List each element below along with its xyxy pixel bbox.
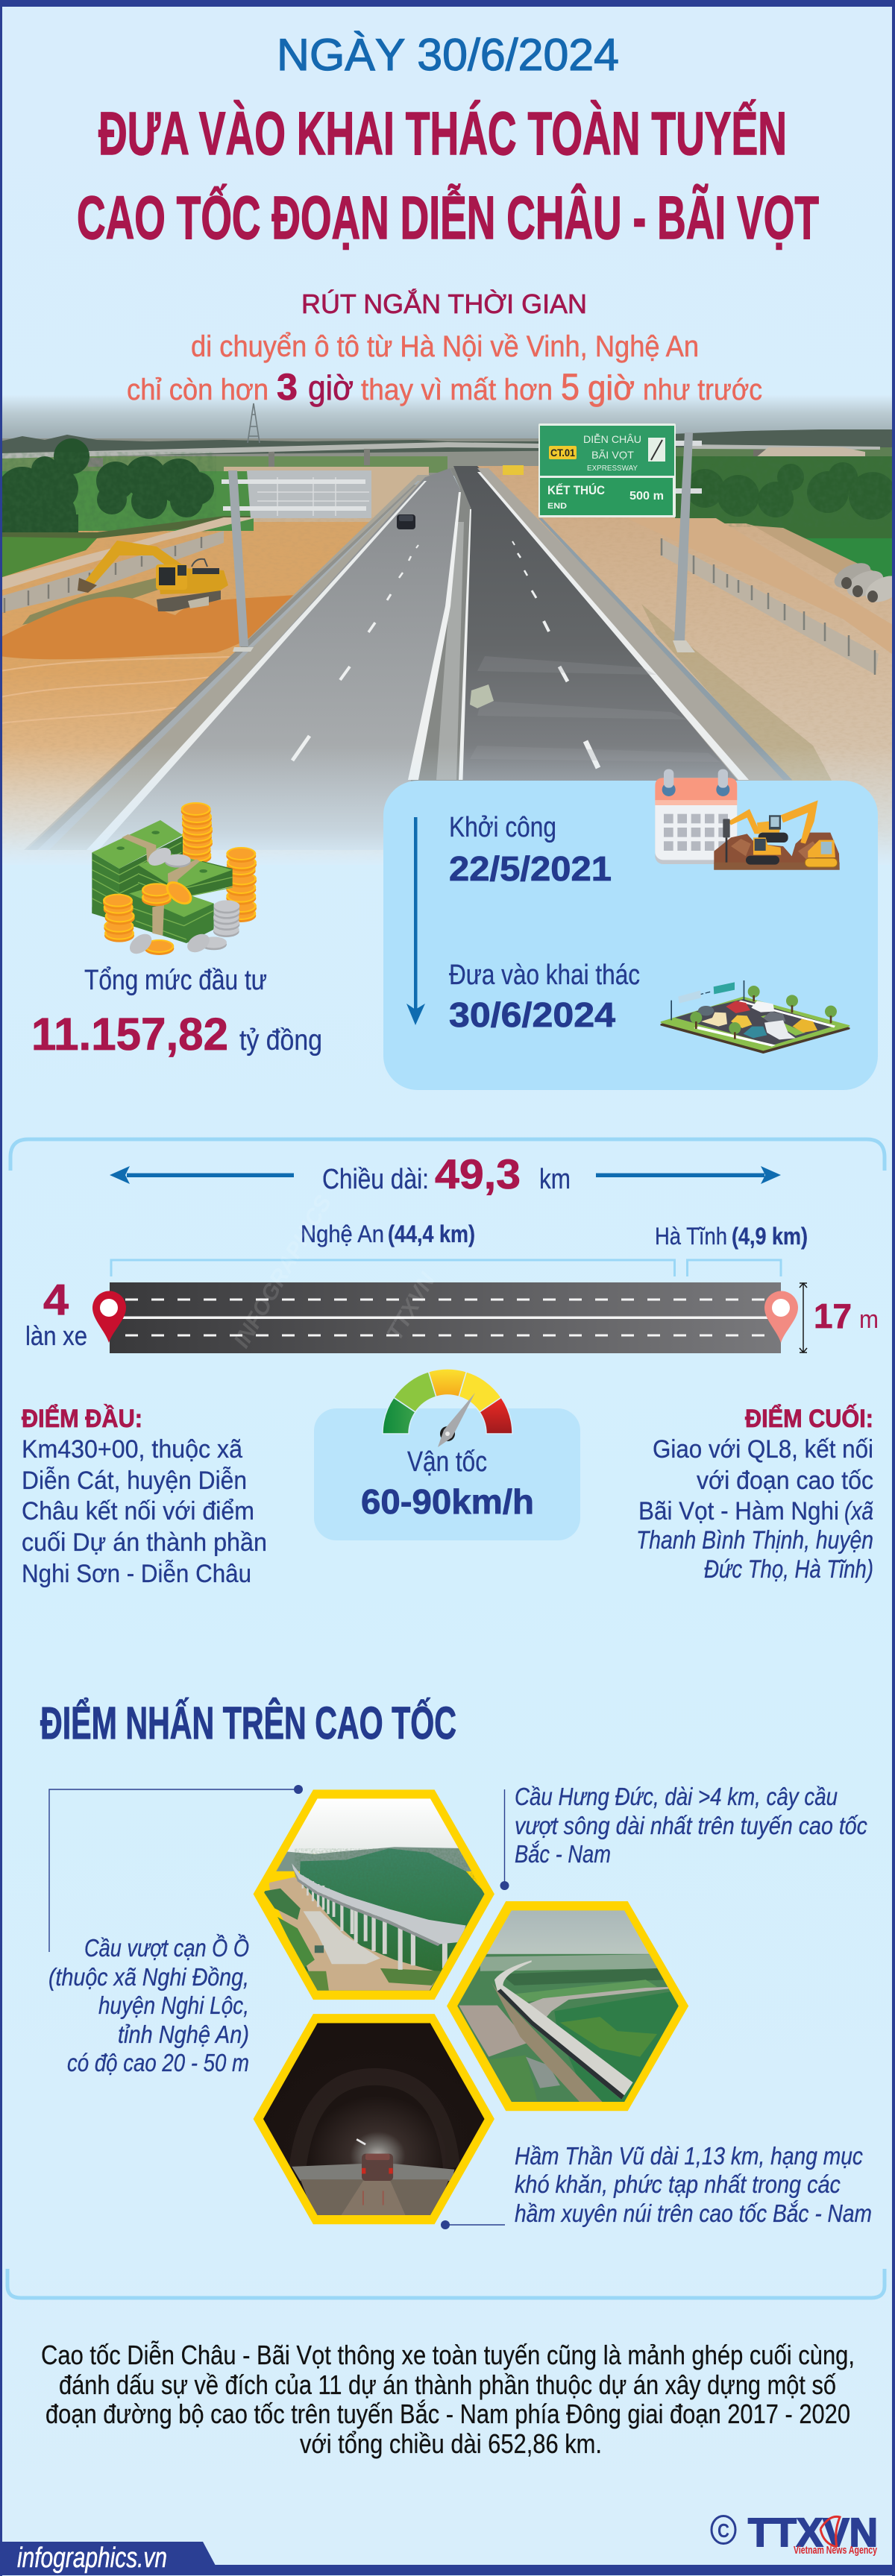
- TTXVN logo: [712, 2510, 878, 2557]
- concrete pipes: [834, 563, 892, 602]
- photo fade to background: [0, 746, 895, 865]
- panel: timeline: [383, 769, 878, 1090]
- subtitle line 3: giờ: [588, 368, 635, 407]
- closing paragraph: [41, 2340, 855, 2459]
- green highway sign: CT.01: [550, 447, 575, 459]
- end point text: [636, 1404, 873, 1584]
- callout text: tỉnh Nghệ An): [118, 2021, 249, 2048]
- length label: Chiều dài:: [322, 1164, 429, 1195]
- footer tab: [2, 2542, 216, 2574]
- right hedges and fields: [675, 456, 895, 589]
- right fence: [661, 538, 879, 675]
- right gantry pole: [673, 432, 702, 652]
- start date: 22/5/2021: [449, 849, 612, 888]
- open label: Đưa vào khai thác: [449, 960, 640, 991]
- left ground sand: [2, 522, 411, 854]
- icon: start pin: [92, 1291, 126, 1343]
- Nghệ An label: Nghệ An: [301, 1221, 384, 1247]
- end point description: Bãi Vọt - Hàm Nghi: [638, 1497, 839, 1525]
- icon: speedometer: [383, 1369, 512, 1447]
- width unit: m: [859, 1306, 879, 1334]
- right dirt road: [675, 518, 892, 654]
- road strip: TTXVN: [382, 1268, 441, 1345]
- investment label: Tổng mức đầu tư: [84, 965, 267, 996]
- Nghệ An label: [301, 1221, 475, 1247]
- width arrow: [800, 1283, 807, 1352]
- timeline arrow: [406, 817, 425, 1025]
- icon: road with cars: [662, 980, 849, 1053]
- date heading: NGÀY 30/6/2024: [277, 30, 619, 80]
- end point description: [636, 1435, 873, 1584]
- subtitle line 3: [127, 366, 762, 408]
- lanes label: làn xe: [25, 1320, 87, 1351]
- Hà Tĩnh label: [655, 1223, 808, 1250]
- green highway sign: 500 m: [629, 490, 664, 503]
- highlights heading: ĐIỂM NHẤN TRÊN CAO TỐC: [40, 1698, 456, 1748]
- pylon: [248, 403, 260, 443]
- callout text: [515, 2142, 872, 2227]
- callout text: có độ cao 20 - 50 m: [67, 2049, 249, 2076]
- start point description: Nghi Sơn - Diễn Châu: [22, 1560, 251, 1588]
- callout text: khó khăn, phức tạp nhất trong các: [515, 2170, 841, 2198]
- green highway sign: EXPRESSWAY: [587, 465, 638, 473]
- green highway sign: [538, 423, 676, 517]
- start point heading: ĐIỂM ĐẦU:: [22, 1405, 142, 1433]
- highlight hexagons: [246, 1789, 688, 2224]
- subtitle heading: RÚT NGẮN THỜI GIAN: [301, 288, 587, 319]
- left gantry: [222, 470, 371, 652]
- start point description: Diễn Cát, huyện Diễn: [22, 1467, 247, 1495]
- subtitle line 3: thay vì mất hơn: [361, 374, 553, 406]
- Hà Tĩnh label: Hà Tĩnh: [655, 1223, 727, 1250]
- panel: speed: [314, 1369, 580, 1540]
- arrow right: [596, 1166, 781, 1184]
- section: length: [25, 1150, 879, 1353]
- footer site name: infographics.vn: [17, 2542, 167, 2574]
- yellow roadside sign: [503, 465, 524, 475]
- car: [397, 514, 415, 529]
- start point description: [22, 1435, 267, 1588]
- green highway sign: END: [547, 502, 567, 511]
- subtitle line 3: 3: [277, 366, 298, 408]
- far tree line: [0, 429, 895, 456]
- subtitle line 3: chỉ còn hơn: [127, 374, 268, 406]
- callout: Ồ Ồ viaduct: [48, 1785, 303, 2076]
- arrow left: [110, 1166, 294, 1184]
- length unit: km: [539, 1164, 571, 1195]
- road strip: INFOGRAPHICS: [229, 1191, 336, 1352]
- callout: Hưng Đức bridge: [500, 1783, 867, 1890]
- subtitle line 2: di chuyển ô tô từ Hà Nội về Vinh, Nghệ An: [191, 330, 699, 363]
- segment brackets: [111, 1260, 781, 1276]
- bottom bracket: [7, 2269, 885, 2298]
- green highway sign: DIỄN CHÂU: [583, 433, 641, 445]
- investment unit: tỷ đồng: [239, 1024, 322, 1056]
- callout text: Cầu Hưng Đức, dài >4 km, cây cầu: [515, 1783, 838, 1810]
- start point description: Châu kết nối với điểm: [22, 1497, 254, 1525]
- speed value: 60-90km/h: [361, 1482, 534, 1521]
- end point description: Giao với QL8, kết nối: [653, 1435, 873, 1464]
- subtitle line 3: như trước: [643, 374, 762, 406]
- end point description: với đoạn cao tốc: [697, 1467, 873, 1495]
- end point description: (xã: [844, 1497, 873, 1525]
- median: [410, 468, 471, 781]
- end point heading: ĐIỂM CUỐI:: [745, 1404, 873, 1433]
- icon: end pin: [764, 1291, 798, 1343]
- subtitle line 3: 5: [561, 366, 580, 408]
- left fence: [0, 531, 224, 613]
- top bracket: [10, 1139, 885, 1171]
- callout text: [515, 1783, 867, 1868]
- left carriageway: [30, 475, 430, 850]
- lane dashes: [292, 541, 598, 768]
- callout: Thần Vũ tunnel: [441, 2142, 872, 2229]
- lanes number: 4: [43, 1276, 69, 1324]
- closing paragraph: với tổng chiều dài 652,86 km.: [300, 2428, 602, 2459]
- connector line: [500, 1789, 509, 1890]
- title block: [77, 30, 819, 252]
- start point description: cuối Dự án thành phần: [22, 1528, 267, 1557]
- hexagon: Thần Vũ tunnel: [254, 2014, 494, 2224]
- overpass right: [448, 442, 541, 448]
- copyright mark: C: [717, 2519, 729, 2542]
- icon: calendar with excavators: [655, 769, 840, 870]
- start point description: Km430+00, thuộc xã: [22, 1435, 242, 1464]
- copyright mark: [712, 2516, 735, 2544]
- left trees and fields: [0, 471, 254, 531]
- Hà Tĩnh label: (4,9 km): [732, 1223, 808, 1250]
- hexagon: Hưng Đức bridge: [446, 1901, 688, 2111]
- excavator: [78, 541, 228, 611]
- start label: Khởi công: [449, 812, 556, 843]
- orange mound: [0, 593, 313, 659]
- callout text: Bắc - Nam: [515, 1840, 611, 1868]
- green highway sign: BÃI VỌT: [591, 449, 634, 461]
- right ground: [477, 466, 895, 865]
- panel: investment: [31, 802, 322, 1059]
- icon: money stacks: [92, 802, 257, 958]
- subtitle block: [127, 288, 762, 408]
- length value: 49,3: [435, 1150, 521, 1197]
- start point text: [22, 1405, 267, 1588]
- subtitle line 3: giờ: [308, 368, 354, 407]
- speed label: Vận tốc: [407, 1446, 487, 1478]
- logo swoosh: [820, 2516, 840, 2547]
- callout text: (thuộc xã Nghi Đồng,: [48, 1963, 249, 1991]
- investment value: 11.157,82: [31, 1009, 228, 1059]
- callout text: huyện Nghi Lộc,: [98, 1991, 249, 2019]
- Nghệ An label: (44,4 km): [388, 1221, 475, 1247]
- green highway sign: KẾT THÚC: [547, 483, 605, 497]
- overpass left: [0, 442, 448, 459]
- connector line: [49, 1785, 303, 1952]
- road strip: [110, 1191, 781, 1353]
- callout text: Cầu vượt cạn Ồ Ồ: [84, 1934, 249, 1962]
- hexagon: Ồ Ồ viaduct: [246, 1789, 503, 2000]
- callout text: [48, 1934, 249, 2076]
- right carriageway: [453, 466, 753, 790]
- logo letters: TTXVN: [748, 2510, 878, 2555]
- photo: expressway Diễn Châu - Bãi Vọt: [0, 395, 895, 865]
- open date: 30/6/2024: [449, 995, 615, 1034]
- connector line: [441, 2220, 505, 2229]
- width value: 17: [814, 1297, 852, 1335]
